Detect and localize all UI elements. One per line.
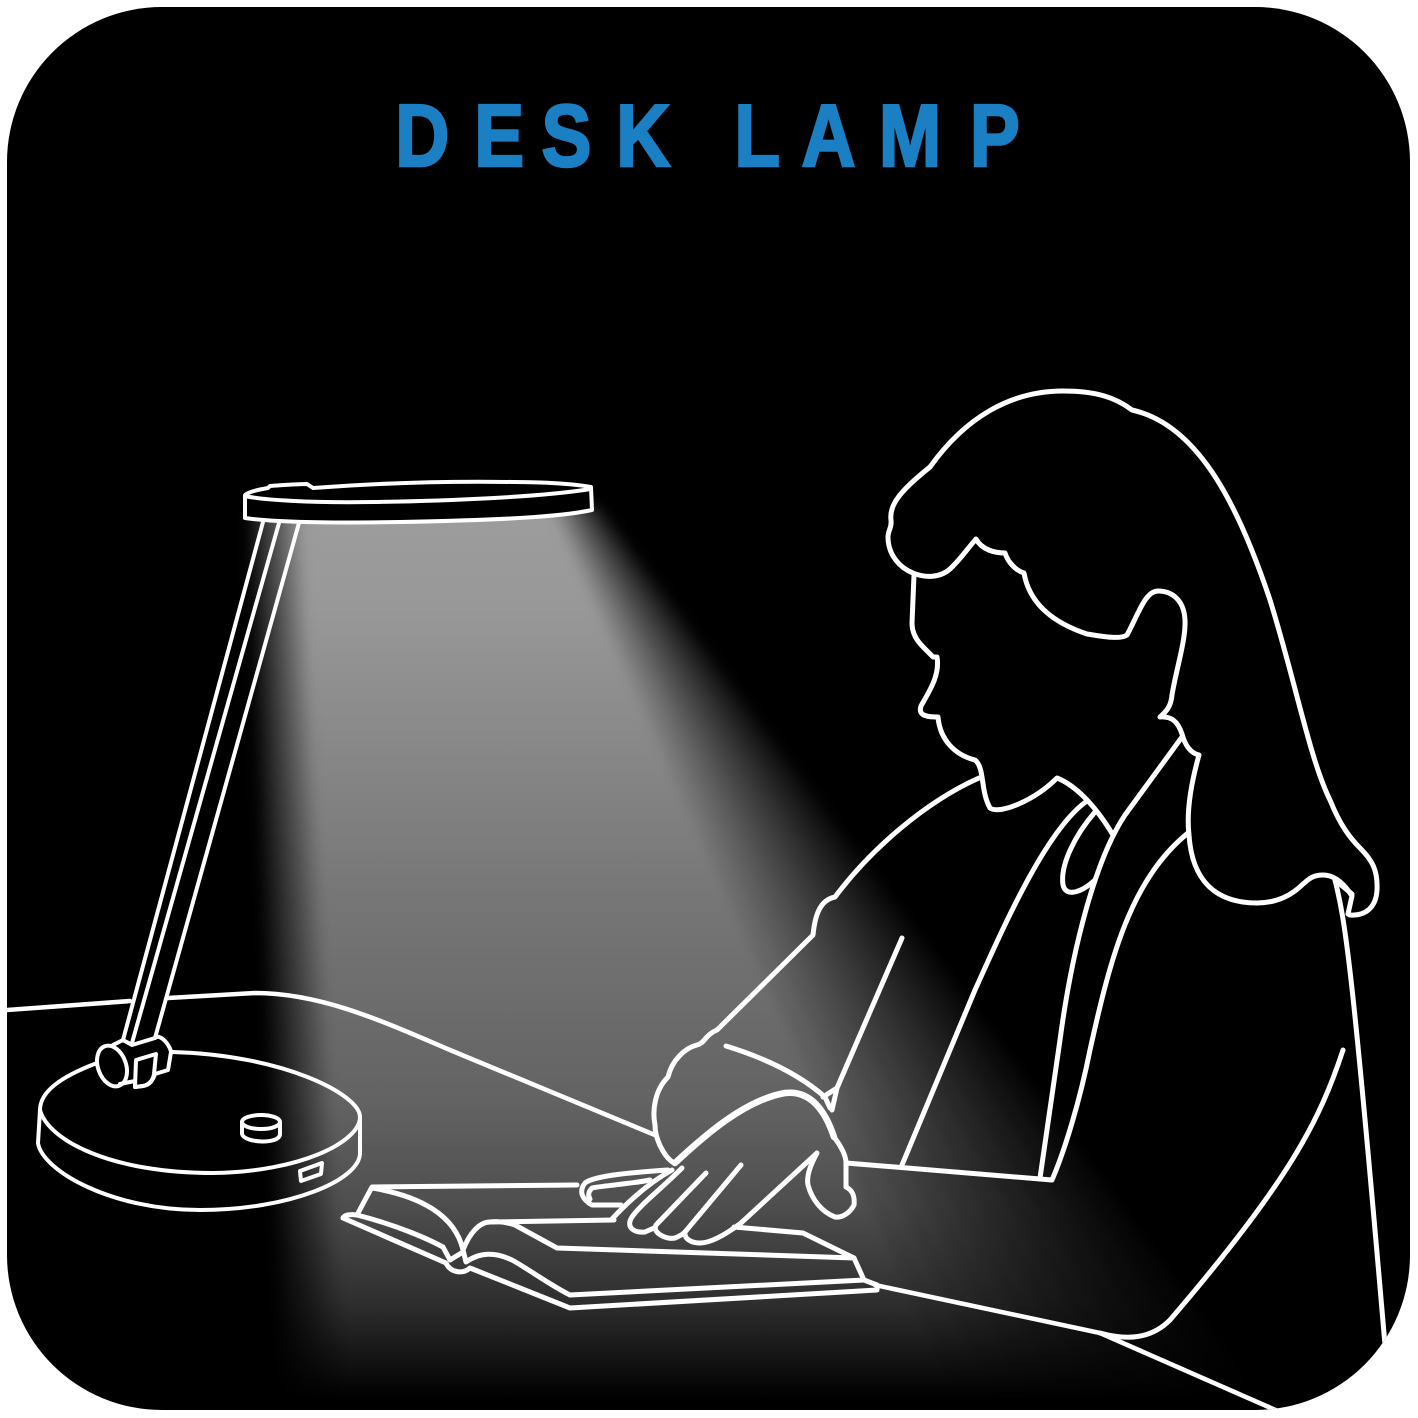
illustration <box>7 391 1385 1418</box>
face and neck <box>912 575 1113 835</box>
lamp hinge <box>92 1037 171 1091</box>
torso lines <box>846 737 1385 1345</box>
lamp arm <box>123 522 299 1043</box>
open book <box>343 1185 877 1308</box>
hair <box>888 391 1377 915</box>
arm and cuff <box>726 938 902 1110</box>
table edge <box>7 993 1280 1412</box>
desk lamp <box>38 482 592 1210</box>
lamp knob <box>242 1115 280 1142</box>
light beam <box>246 502 1152 1382</box>
shoulder and sleeve <box>654 778 979 1163</box>
lamp usb port <box>300 1163 322 1181</box>
hand <box>582 1093 854 1243</box>
title: DESK LAMP <box>395 87 1020 185</box>
lamp base <box>38 1052 360 1210</box>
woman reading <box>582 391 1385 1345</box>
lamp head <box>245 482 592 523</box>
